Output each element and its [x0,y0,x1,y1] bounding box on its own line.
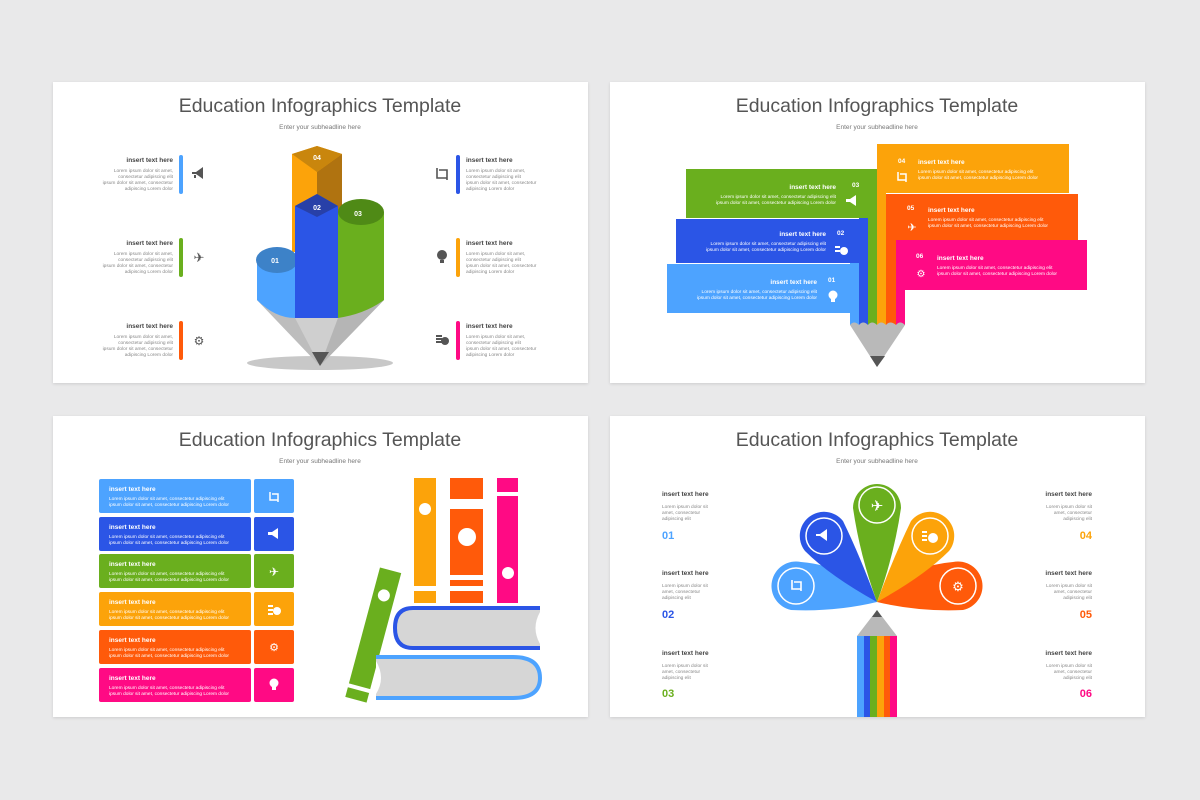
row 1 [99,479,294,513]
row 1: ipsum dolor sit amet, consectetur adipiscing Lorem dolor [109,502,229,508]
right text block 2: Lorem ipsum dolor sit amet, [466,251,525,257]
left item 02: amet, consectetur [662,589,701,595]
bar 01 [256,247,298,318]
left item 01: amet, consectetur [662,510,701,516]
right text block 3: Lorem ipsum dolor sit amet, [466,334,525,340]
bar 04: 04 [313,155,321,162]
left item 03: amet, consectetur [662,669,701,675]
left text block 3: adipiscing Lorem dolor [125,352,173,358]
right item 06 [1045,650,1093,700]
subtitle: Enter your subheadline here [279,458,361,465]
left text block 1: insert text here [126,157,173,164]
box 02 blue: insert text here [779,231,826,238]
left text block 1: ipsum dolor sit amet, consectetur [103,180,173,186]
right item 06: amet, consectetur [1054,669,1092,675]
box 06 pink: ipsum dolor sit amet, consectetur adipiscing Lorem dolor [937,271,1057,277]
row 6: ipsum dolor sit amet, consectetur adipiscing Lorem dolor [109,691,229,697]
right text block 1: ipsum dolor sit amet, consectetur [466,180,537,186]
right text block 1: consectetur adipiscing elit [466,174,522,180]
petal blue [800,512,877,602]
right text block 3: insert text here [466,323,513,330]
left item 01: Lorem ipsum dolor sit [662,504,709,510]
bar 04 [292,146,342,252]
icon: crop [437,168,447,180]
row 5: ⚙ [269,642,279,654]
right text block 2: ipsum dolor sit amet, consectetur [466,263,537,269]
left text block 2: consectetur adipiscing elit [118,257,174,263]
box 05 orange-red: Lorem ipsum dolor sit amet, consectetur adipiscing elit [928,217,1044,223]
right text block 2: insert text here [466,240,513,247]
box 05 orange-red: ✈ [907,222,917,234]
right item 04: Lorem ipsum dolor sit [1046,504,1093,510]
left item 03: adipiscing elit [662,675,691,681]
bar 03: 03 [354,211,362,218]
left text block 3 [103,321,183,360]
title: Education Infographics Template [736,429,1018,451]
petal orange [877,512,954,602]
petal green: ✈ [871,498,883,515]
box 06 pink: insert text here [937,255,984,262]
right text block 3 [456,321,537,360]
row 5 [99,630,294,664]
box 01 light blue: insert text here [770,279,817,286]
book blue stack top [395,608,540,648]
left text block 3: Lorem ipsum dolor sit amet, [114,334,173,340]
box 03 green: Lorem ipsum dolor sit amet, consectetur adipiscing elit [721,194,837,200]
box 02 blue [676,219,868,263]
row 6 [99,668,294,702]
right item 04: adipiscing elit [1063,516,1093,522]
left text block 2: insert text here [126,240,173,247]
box 06 pink: ⚙ [917,269,926,280]
petal light blue [771,561,877,610]
right text block 3: consectetur adipiscing elit [466,340,522,346]
subtitle: Enter your subheadline here [836,458,918,465]
right item 06: insert text here [1045,650,1092,657]
flower petals [771,484,983,610]
box 03 green [686,169,877,218]
right item 06: 06 [1080,688,1092,700]
box 02 blue: 02 [837,230,845,237]
bar 03 [338,199,384,318]
box 04 orange [877,144,1069,193]
right text block 1: insert text here [466,157,513,164]
right text block 3: adipiscing Lorem dolor [466,352,515,358]
row 3: ipsum dolor sit amet, consectetur adipiscing Lorem dolor [109,577,229,583]
right text block 2: consectetur adipiscing elit [466,257,522,263]
left item 02: adipiscing elit [662,595,691,601]
right item 04: 04 [1080,530,1093,542]
left text block 2: ipsum dolor sit amet, consectetur [103,263,173,269]
left text block 2 [103,238,183,277]
row 2: Lorem ipsum dolor sit amet, consectetur adipiscing elit [109,534,225,540]
box 03 green: insert text here [789,184,836,191]
row 5: Lorem ipsum dolor sit amet, consectetur adipiscing elit [109,647,225,653]
left item 03 [662,650,709,700]
box 05 orange-red: ipsum dolor sit amet, consectetur adipiscing Lorem dolor [928,223,1048,229]
box 06 pink: Lorem ipsum dolor sit amet, consectetur adipiscing elit [937,265,1053,271]
row 4: ipsum dolor sit amet, consectetur adipiscing Lorem dolor [109,615,229,621]
book pink [497,478,518,603]
right text block 1: Lorem ipsum dolor sit amet, [466,168,525,174]
box 04 orange: insert text here [918,159,965,166]
left item 02: insert text here [662,570,709,577]
title: Education Infographics Template [179,95,461,117]
book orange [414,478,436,603]
right item 04: amet, consectetur [1054,510,1092,516]
right item 05: Lorem ipsum dolor sit [1046,583,1093,589]
row 5: ipsum dolor sit amet, consectetur adipiscing Lorem dolor [109,653,229,659]
icon: plane: ✈ [194,250,205,265]
book orange-red [450,478,483,603]
left text block 1: adipiscing Lorem dolor [125,186,173,192]
slide 2: ribbon pencil infographic [610,82,1145,383]
right item 04 [1045,491,1093,542]
left item 01 [662,491,709,542]
row 4 [99,592,294,626]
row 3: ✈ [269,565,279,579]
right item 04: insert text here [1045,491,1092,498]
box 05 orange-red: 05 [907,205,915,212]
icon: bulb [437,250,447,263]
right item 06: adipiscing elit [1063,675,1093,681]
box 03 green: 03 [852,182,860,189]
left item 01: insert text here [662,491,709,498]
row 1: insert text here [109,486,156,493]
slide 4: flower pencil infographic [610,416,1145,717]
box 02 blue: Lorem ipsum dolor sit amet, consectetur adipiscing elit [711,241,827,247]
right item 05 [1045,570,1093,621]
box 06 pink [896,240,1087,290]
row 3 [99,554,294,588]
box 04 orange: ipsum dolor sit amet, consectetur adipiscing Lorem dolor [918,175,1038,181]
row 1: Lorem ipsum dolor sit amet, consectetur adipiscing elit [109,496,225,502]
row 3: Lorem ipsum dolor sit amet, consectetur adipiscing elit [109,571,225,577]
box 04 orange: 04 [898,158,906,165]
books illustration [345,478,540,703]
subtitle: Enter your subheadline here [836,124,918,131]
icon: gear: ⚙ [194,334,204,348]
row 6: insert text here [109,675,156,682]
left item 01: adipiscing elit [662,516,691,522]
box 01 light blue [667,264,859,313]
right item 05: amet, consectetur [1054,589,1092,595]
box 03 green: ipsum dolor sit amet, consectetur adipiscing Lorem dolor [716,200,836,206]
box 01 light blue: ipsum dolor sit amet, consectetur adipiscing Lorem dolor [697,295,817,301]
right text block 2 [456,238,537,277]
petal green [853,484,901,602]
left text block 3: ipsum dolor sit amet, consectetur [103,346,173,352]
bar 02: 02 [313,205,321,212]
petal orange-red [877,561,983,610]
right item 05: adipiscing elit [1063,595,1093,601]
slide 1: 3D pencil infographic [53,82,588,383]
pencil body strips [850,182,905,325]
title: Education Infographics Template [736,95,1018,117]
left text block 3: consectetur adipiscing elit [118,340,174,346]
box 05 orange-red [886,194,1078,240]
right item 05: 05 [1080,609,1092,621]
box 01 light blue: 01 [828,277,836,284]
left text block 2: adipiscing Lorem dolor [125,269,173,275]
left text block 1: consectetur adipiscing elit [118,174,174,180]
left text block 1 [103,155,183,194]
box 06 pink: 06 [916,253,924,260]
pencil tip [850,322,905,367]
title: Education Infographics Template [179,429,461,451]
left item 03: insert text here [662,650,709,657]
icon: coins [436,335,449,345]
left text block 2: Lorem ipsum dolor sit amet, [114,251,173,257]
3D pencil chart [247,146,393,370]
left item 02: Lorem ipsum dolor sit [662,583,709,589]
bar 02 [295,194,338,318]
row 2: insert text here [109,524,156,531]
row 4: Lorem ipsum dolor sit amet, consectetur adipiscing elit [109,609,225,615]
row 5: insert text here [109,637,156,644]
slide 3: book list infographic [53,416,588,717]
bar 01: 01 [271,258,279,265]
left text block 3: insert text here [126,323,173,330]
right text block 1: adipiscing Lorem dolor [466,186,515,192]
subtitle: Enter your subheadline here [279,124,361,131]
left item 01: 01 [662,530,674,542]
row 3: insert text here [109,561,156,568]
right item 05: insert text here [1045,570,1092,577]
box 02 blue: ipsum dolor sit amet, consectetur adipiscing Lorem dolor [706,247,826,253]
box 04 orange: Lorem ipsum dolor sit amet, consectetur adipiscing elit [918,169,1034,175]
book light blue stack bottom [376,657,540,698]
left text block 1: Lorem ipsum dolor sit amet, [114,168,173,174]
book green tilted [345,567,401,703]
colored pencil [857,610,897,717]
row 2 [99,517,294,551]
row 2: ipsum dolor sit amet, consectetur adipiscing Lorem dolor [109,540,229,546]
left item 03: 03 [662,688,674,700]
box 05 orange-red: insert text here [928,207,975,214]
right text block 2: adipiscing Lorem dolor [466,269,515,275]
left item 02: 02 [662,609,674,621]
right text block 3: ipsum dolor sit amet, consectetur [466,346,537,352]
box 01 light blue: Lorem ipsum dolor sit amet, consectetur adipiscing elit [702,289,818,295]
right text block 1 [456,155,537,194]
petal orange-red: ⚙ [952,579,964,594]
row 4: insert text here [109,599,156,606]
right item 06: Lorem ipsum dolor sit [1046,663,1093,669]
icon: megaphone [192,167,203,179]
row 6: Lorem ipsum dolor sit amet, consectetur adipiscing elit [109,685,225,691]
left item 03: Lorem ipsum dolor sit [662,663,709,669]
left item 02 [662,570,709,621]
